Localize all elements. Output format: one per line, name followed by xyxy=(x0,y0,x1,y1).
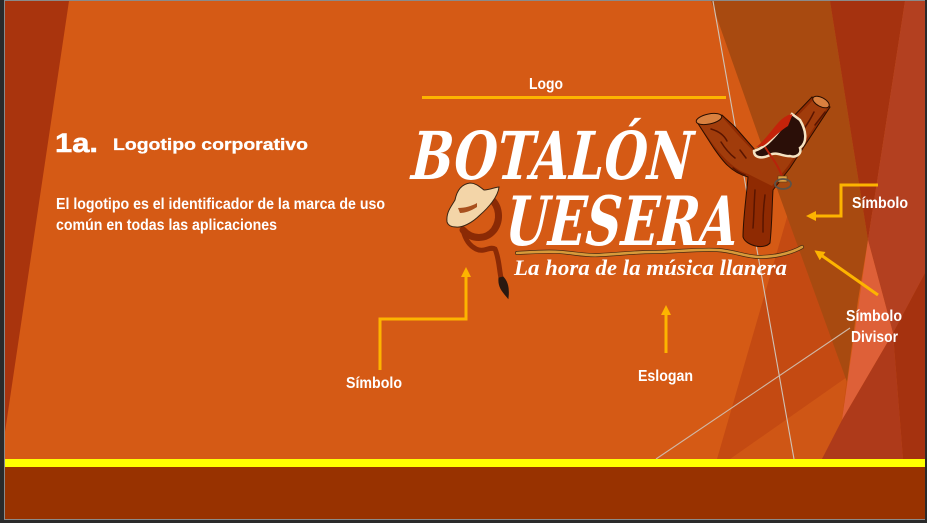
arrow: to rope Q symbol xyxy=(380,275,466,370)
heading: 1a. Logotipo corporativo: Logotipo corporativo xyxy=(113,135,308,154)
label: Símbolo right: Símbolo xyxy=(852,195,908,212)
label: Símbolo Divisor xyxy=(846,308,902,346)
label: Eslogan: Eslogan xyxy=(638,368,693,385)
slogan: La hora de la música llanera xyxy=(513,255,787,280)
icon: saddle xyxy=(754,114,805,189)
text block: description: El logotipo es el identificador de la marca de uso xyxy=(56,196,385,213)
heading: 1a. Logotipo corporativo xyxy=(55,128,308,158)
heading: 1a. Logotipo corporativo: 1a. xyxy=(55,128,98,158)
icon: rope Q with tassel xyxy=(463,198,508,298)
label: Símbolo Divisor: Divisor xyxy=(851,329,898,346)
label: Símbolo Divisor: Símbolo xyxy=(846,308,902,325)
arrow: to divider symbol xyxy=(821,255,878,295)
arrow: to slogan xyxy=(664,313,668,353)
logo wordmark: Botalón: BOTALÓN xyxy=(404,117,701,195)
rule under logo label xyxy=(422,96,726,99)
icon: forked log xyxy=(695,94,831,247)
icon: cowboy hat xyxy=(447,183,499,227)
arrow: to log symbol xyxy=(814,185,878,216)
text block: description: común en todas las aplicaciones xyxy=(56,217,277,234)
text block: description xyxy=(56,196,385,234)
label: Símbolo left: Símbolo xyxy=(346,375,402,392)
logo: Botalón Quesera xyxy=(404,94,831,298)
logo wordmark: uesera: UESERA xyxy=(497,182,748,262)
divider: rope xyxy=(517,247,802,257)
yellow stripe xyxy=(5,459,925,467)
dark footer band xyxy=(5,467,925,519)
label: Logo: Logo xyxy=(529,76,563,93)
